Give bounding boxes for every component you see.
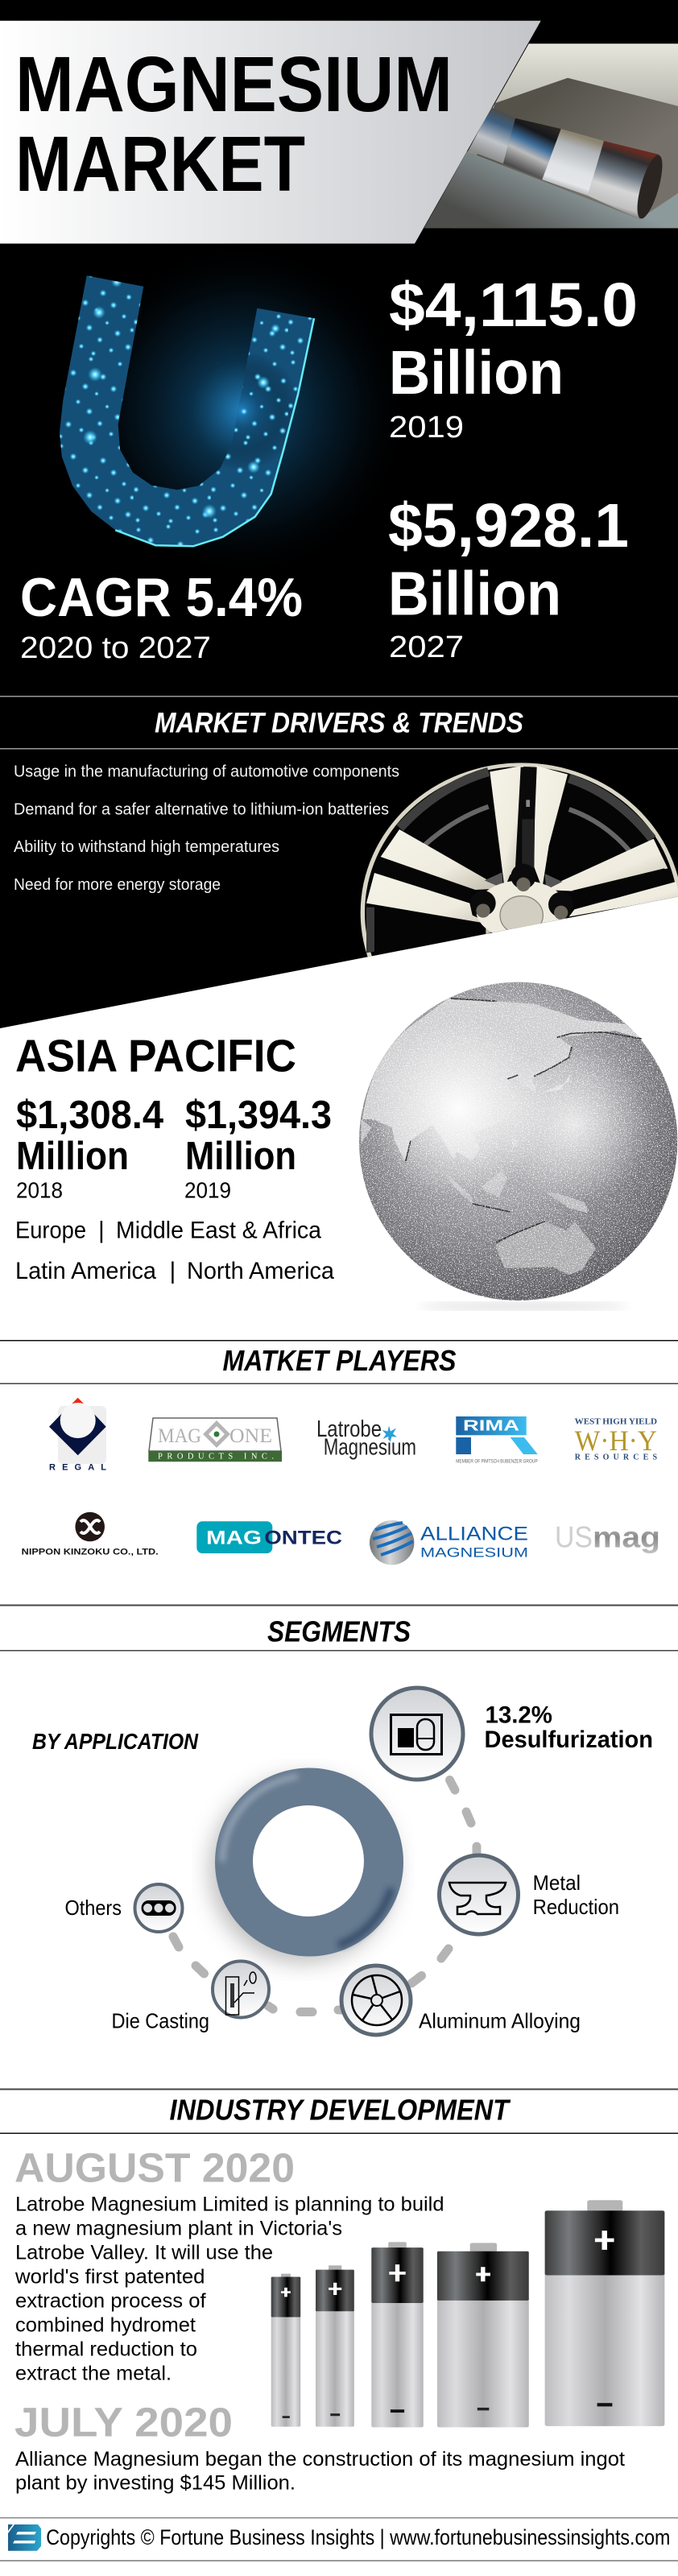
logo: Magontec (196, 1521, 342, 1553)
stat: 2018 value: 2018 (16, 1177, 63, 1203)
list: drivers: Usage in the manufacturing of automotive components (14, 763, 399, 781)
title banner (0, 21, 541, 244)
logo: Alliance Magnesium (370, 1520, 528, 1565)
battery 5 (545, 2200, 664, 2426)
logo: West High Yield: RESOURCES (575, 1453, 657, 1462)
stat: 2019 value: Billion (389, 338, 564, 407)
segment: aluminum alloying: Aluminum Alloying (419, 2009, 581, 2033)
logo: West High Yield: W·H·Y (575, 1424, 657, 1457)
image: batteries (271, 2200, 664, 2427)
segment: desulfurization (371, 1688, 653, 1780)
logo: Mag One Products: PRODUCTS INC. (158, 1453, 274, 1462)
text: August 2020 development: world's first patented (14, 2266, 205, 2289)
CAGR period: 2020 to 2027 (20, 631, 211, 665)
icon: glowing magnet U (60, 275, 376, 548)
heading: industry development: INDUSTRY DEVELOPMENT (169, 2094, 511, 2126)
segment: metal reduction: Metal (533, 1871, 581, 1895)
logo: RIMA: RIMA (463, 1418, 519, 1434)
stat: 2019 value (389, 271, 638, 444)
list: drivers: Demand for a safer alternative to lithium-ion batteries (14, 800, 389, 818)
text: August 2020 development: extract the metal. (15, 2363, 172, 2385)
logo: US Mag (555, 1521, 660, 1554)
stat: 2019 value: 2019 (389, 411, 464, 444)
heading: market drivers and trends: MARKET DRIVERS & TRENDS (155, 707, 523, 739)
stat: CAGR: CAGR 5.4% (20, 567, 303, 628)
text: August 2020 development: Latrobe Magnesium Limited is planning to build (15, 2193, 444, 2215)
logo: RIMA (456, 1416, 538, 1465)
stat: 2019 value: $4,115.0 (389, 271, 638, 340)
heading: market players: MATKET PLAYERS (222, 1344, 456, 1377)
segment: desulfurization: Desulfurization (485, 1726, 653, 1753)
image: metal globe (359, 982, 678, 1310)
stat: 2018 value: $1,308.4 (16, 1094, 163, 1137)
logo: US Mag: mag (593, 1521, 660, 1554)
title: MAGNESIUM (15, 40, 453, 128)
logo: Latrobe Magnesium: Magnesium (324, 1435, 416, 1461)
battery 1 (271, 2274, 300, 2427)
logo: Magontec: MAG (206, 1528, 262, 1549)
logo: West High Yield (575, 1416, 657, 1462)
icon: Fortune Business Insights logo (8, 2524, 41, 2551)
logo: Mag One Products: ONE (229, 1425, 272, 1447)
segment: die casting: Die Casting (111, 2009, 209, 2033)
heading: region: ASIA PACIFIC (15, 1030, 296, 1081)
battery 3 (371, 2242, 424, 2427)
logo: West High Yield: WEST HIGH YIELD (575, 1416, 657, 1426)
text: other regions (15, 1218, 334, 1284)
battery 2 (316, 2265, 354, 2427)
heading: segments: SEGMENTS (267, 1615, 411, 1648)
stat: 2027 value: $5,928.1 (388, 491, 629, 560)
stat: 2019 value: $1,394.3 (185, 1094, 332, 1137)
stat: 2027 value: 2027 (389, 631, 464, 664)
text: August 2020 development: combined hydromet (15, 2314, 196, 2337)
text: other regions: | (98, 1218, 105, 1243)
text: other regions: | (169, 1258, 176, 1284)
list: drivers: Ability to withstand high temperatures (14, 837, 279, 856)
segment: desulfurization: 13.2% (485, 1702, 552, 1728)
text: other regions: North America (187, 1258, 334, 1284)
text: July 2020 development (15, 2448, 625, 2495)
logo: RIMA: MEMBER OF PIMTSCH BUBENZER GROUP (456, 1460, 538, 1465)
list: drivers: Need for more energy storage (14, 875, 221, 894)
segment: others (64, 1884, 182, 1932)
logo: Latrobe Magnesium: Latrobe (316, 1416, 382, 1442)
stat: 2019 value: Million (185, 1135, 296, 1178)
title line 2: MARKET (15, 120, 305, 208)
logo: Nippon Kinzoku: NIPPON KINZOKU CO., LTD. (22, 1548, 159, 1557)
logo: Magontec: ONTEC (264, 1528, 342, 1549)
label: by application: BY APPLICATION (32, 1729, 199, 1754)
logo: US Mag: US (555, 1521, 593, 1554)
list: drivers (14, 763, 399, 894)
segment: metal reduction: Reduction (533, 1895, 619, 1919)
stat: 2027 value (388, 491, 629, 664)
battery 4 (437, 2243, 529, 2427)
segment: die casting (111, 1962, 269, 2033)
text: other regions: Europe (15, 1218, 86, 1243)
stat: 2019 value: 2019 (184, 1177, 231, 1203)
photo: magnesium rod (424, 43, 678, 228)
heading: August 2020: AUGUST 2020 (14, 2145, 295, 2191)
text: other regions: Middle East & Africa (116, 1218, 321, 1243)
logo: Regal (49, 1398, 106, 1473)
logo: Alliance Magnesium: ALLIANCE (420, 1524, 528, 1545)
block: Asia Pacific (15, 1030, 334, 1284)
logo: Latrobe Magnesium (316, 1416, 416, 1461)
stat: 2019 value (184, 1094, 332, 1203)
image: alloy wheel (361, 763, 678, 957)
logo: Nippon Kinzoku (22, 1512, 159, 1557)
stat: 2018 value (16, 1094, 163, 1203)
stat: CAGR (20, 567, 303, 665)
text: August 2020 development: thermal reduction to (15, 2338, 197, 2361)
text: other regions: Latin America (15, 1258, 156, 1284)
segment: others: Others (64, 1896, 122, 1920)
chart: segment ring with connectors (64, 1688, 653, 2035)
footer (8, 2524, 670, 2551)
logo: Mag One Products: MAG (158, 1425, 201, 1447)
text: August 2020 development: a new magnesium plant in Victoria's (15, 2218, 342, 2240)
text: August 2020 development: Latrobe Valley. It will use the (15, 2242, 273, 2264)
logo: Regal: REGAL (49, 1463, 106, 1473)
text: August 2020 development (14, 2193, 444, 2385)
logo: Mag One Products (148, 1418, 282, 1462)
text: July 2020 development: plant by investing $145 Million. (15, 2472, 296, 2495)
segment: aluminum alloying (341, 1966, 581, 2035)
panel: hero background (0, 0, 678, 1028)
stat: 2027 value: Billion (388, 559, 561, 628)
text: August 2020 development: extraction process of (15, 2290, 206, 2313)
text: July 2020 development: Alliance Magnesium began the construction of its magnesium ingot (15, 2448, 625, 2471)
heading: July 2020: JULY 2020 (14, 2400, 233, 2445)
logo: Alliance Magnesium: MAGNESIUM (420, 1544, 528, 1560)
segment: metal reduction (440, 1855, 619, 1934)
stat: 2018 value: Million (16, 1135, 129, 1178)
